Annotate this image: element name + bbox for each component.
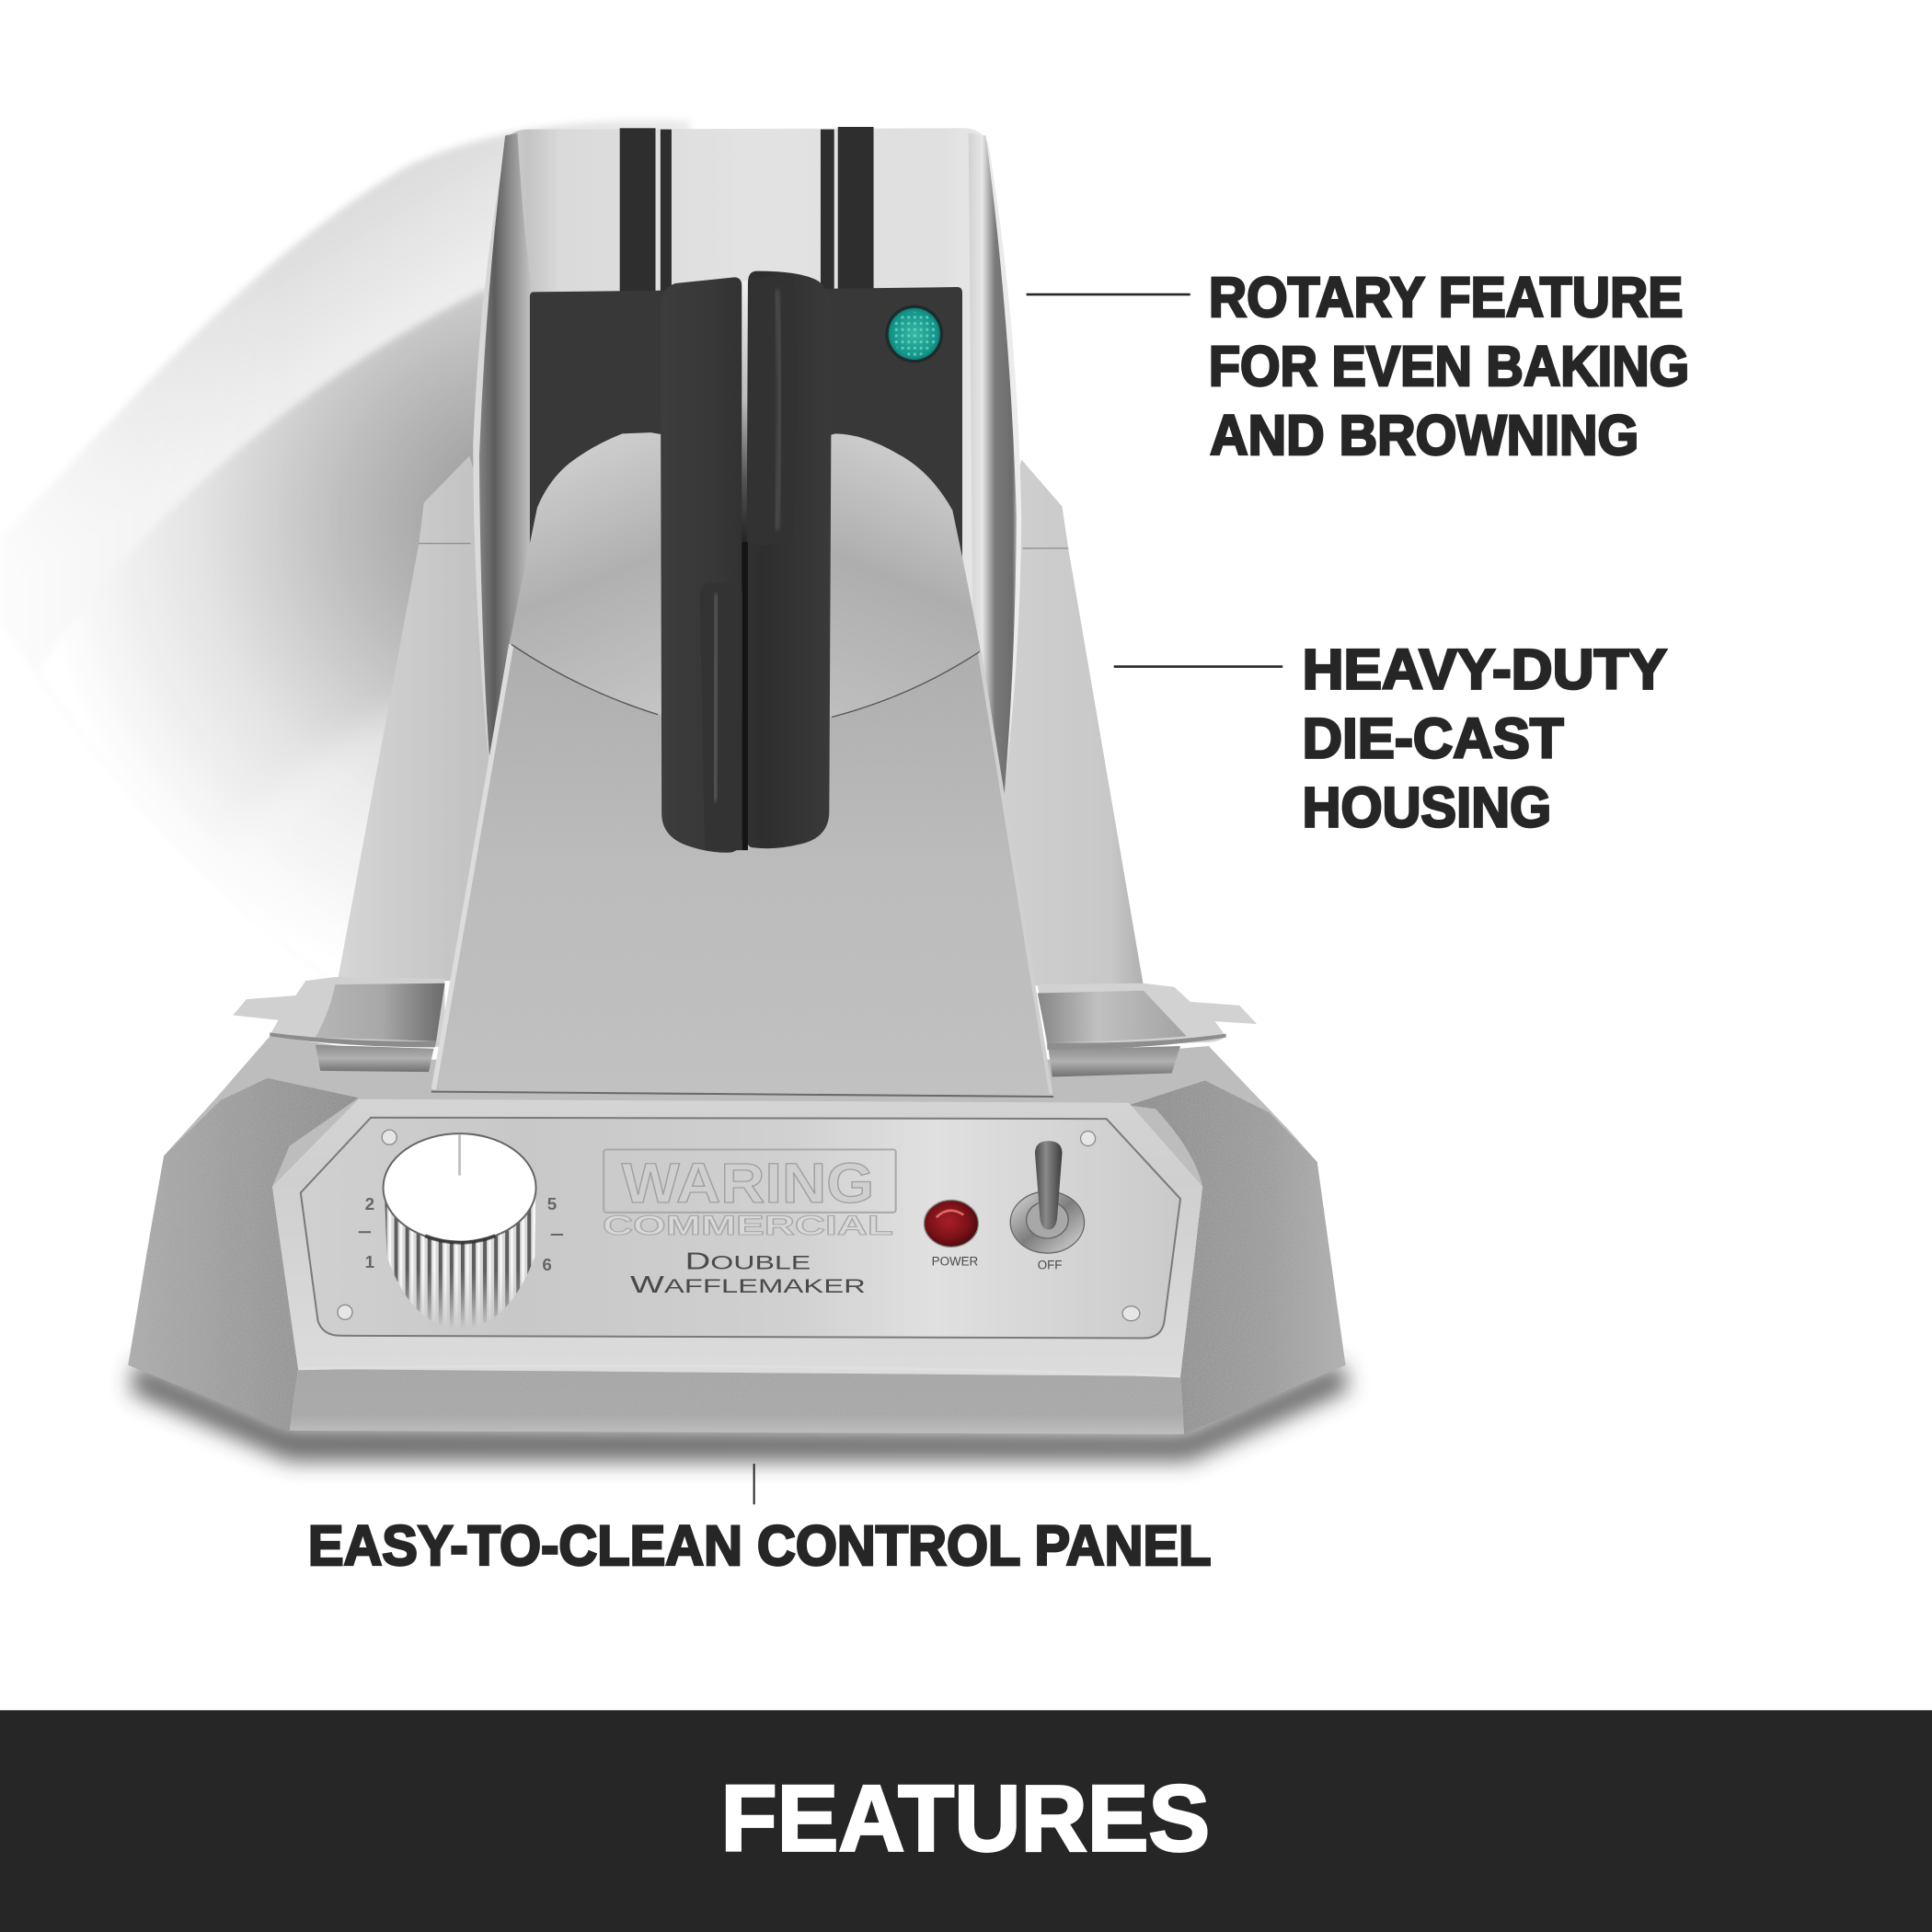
power indicator: POWER — [932, 1254, 979, 1268]
drum slots — [620, 127, 874, 294]
base left facet — [128, 1078, 359, 1431]
power indicator — [924, 1200, 979, 1268]
product name: D OUBLE — [685, 1248, 811, 1274]
base right facet — [1129, 1081, 1345, 1434]
side support wings — [338, 456, 1144, 985]
dial numbers: 2 — [365, 1194, 374, 1213]
green indicator light — [885, 305, 943, 362]
gap between handle halves — [741, 281, 749, 545]
dial numbers: 5 — [547, 1194, 557, 1213]
footer band with title: FEATURES — [720, 1766, 1210, 1871]
base centre band — [272, 1099, 1202, 1376]
callout: die-cast housing: HEAVY-DUTY — [1303, 638, 1667, 702]
rotary drum — [473, 127, 1021, 801]
dial numbers: 1 — [365, 1252, 374, 1271]
brushed control plate — [301, 1118, 1180, 1338]
left shaded band — [479, 133, 533, 770]
brushed upper supports — [509, 432, 981, 719]
textured front pedestal — [431, 644, 1053, 1097]
plate screws — [338, 1130, 1140, 1321]
handle — [661, 271, 832, 853]
embossed WARING logo: WARING — [622, 1152, 874, 1215]
upper latch ridge — [748, 273, 798, 545]
callout: rotary feature: AND BROWNING — [1210, 404, 1639, 467]
toggle switch: OFF — [1038, 1258, 1062, 1271]
ground shadow under base — [131, 1362, 1350, 1461]
handle left half — [661, 277, 742, 853]
waffle maker product — [128, 127, 1345, 1434]
embossed WARING logo — [603, 1150, 896, 1241]
callout: rotary feature — [1027, 266, 1689, 467]
callout: rotary feature: ROTARY FEATURE — [1209, 266, 1683, 329]
product name — [630, 1248, 866, 1298]
callout: rotary feature: FOR EVEN BAKING — [1209, 335, 1689, 398]
dark housing panel — [530, 287, 962, 592]
handle right half — [747, 271, 832, 848]
product name: W AFFLEMAKER — [630, 1272, 866, 1298]
right shaded band — [969, 133, 1017, 795]
base front lip — [290, 1369, 1184, 1434]
temperature dial knob — [384, 1133, 536, 1328]
callout: die-cast housing: HOUSING — [1303, 776, 1551, 840]
callout: die-cast housing — [1114, 638, 1667, 840]
left tray — [233, 977, 444, 1072]
toggle switch — [1010, 1141, 1085, 1271]
dial numbers — [359, 1194, 563, 1274]
base top surface — [164, 1036, 1317, 1192]
callout: control panel: EASY-TO-CLEAN CONTROL PANEL — [308, 1514, 1212, 1578]
footer band with title — [0, 1710, 1932, 1932]
embossed WARING logo: COMMERCIAL — [603, 1211, 893, 1241]
base unit — [128, 1036, 1345, 1434]
dial numbers: 6 — [542, 1255, 552, 1274]
motion blur sweep behind product — [49, 120, 690, 892]
callout: die-cast housing: DIE-CAST — [1303, 707, 1564, 771]
drip trays — [233, 977, 1257, 1077]
right tray — [1038, 983, 1257, 1077]
lower latch ridge — [700, 582, 742, 850]
